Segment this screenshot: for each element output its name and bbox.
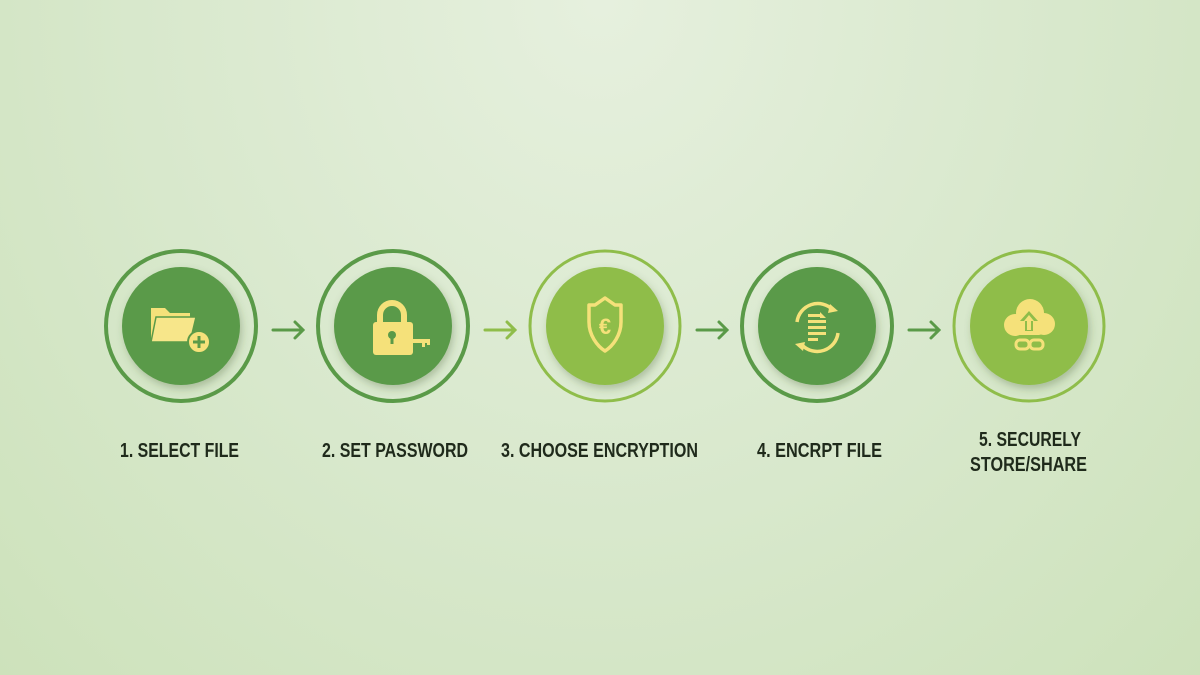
arrow 4 <box>909 322 939 338</box>
label 5: 5. SECURELY <box>979 429 1082 451</box>
icon: refresh document <box>797 304 838 351</box>
step 5: securely store/share <box>954 251 1104 401</box>
label 5: STORE/SHARE <box>970 454 1087 476</box>
label 4: 4. ENCRPT FILE <box>757 440 882 462</box>
label 2: 2. SET PASSWORD <box>322 440 468 462</box>
icon: cloud upload link <box>1004 299 1055 349</box>
label 1: 1. SELECT FILE <box>120 440 239 462</box>
icon: padlock with key <box>373 303 430 355</box>
arrow 1 <box>273 322 303 338</box>
step 4: encrypt file <box>742 251 892 401</box>
arrow 3 <box>697 322 727 338</box>
icon: shield euro <box>589 298 621 351</box>
icon: folder plus <box>151 308 210 353</box>
step 3: choose encryption: € <box>599 314 611 339</box>
label 3: 3. CHOOSE ENCRYPTION <box>501 440 698 462</box>
step 2: set password <box>318 251 468 401</box>
step 1: select file <box>106 251 256 401</box>
step 3: choose encryption <box>530 251 680 401</box>
arrow 2 <box>485 322 515 338</box>
